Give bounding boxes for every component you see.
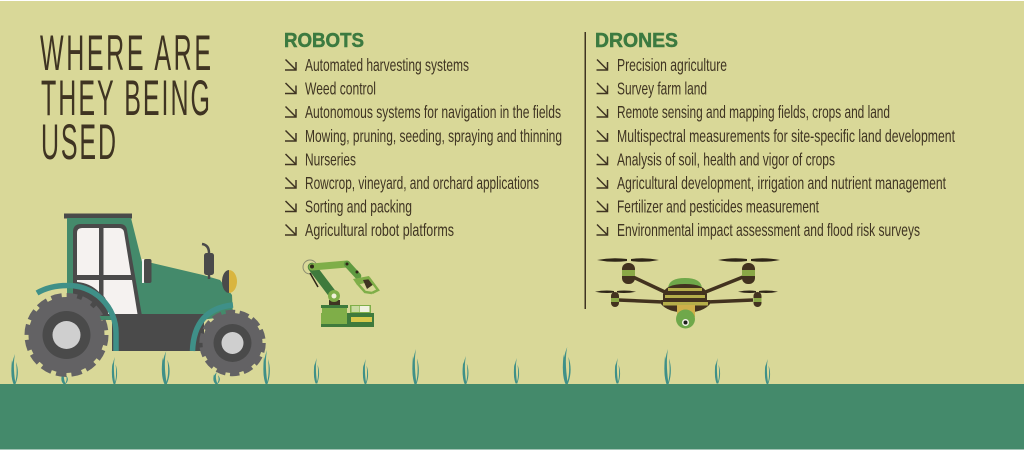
cab window <box>73 224 142 316</box>
robots list items: Rowcrop, vineyard, and orchard applications <box>305 173 539 193</box>
drones list items: Fertilizer and pesticides measurement <box>617 196 819 216</box>
drones list items: Precision agriculture <box>617 55 727 75</box>
robots list items: Autonomous systems for navigation in the fields <box>305 102 561 122</box>
drone motors <box>611 263 762 307</box>
ground <box>0 384 1024 450</box>
mirror <box>142 259 144 283</box>
title: WHERE ARE <box>40 26 211 81</box>
arm joints <box>328 290 340 302</box>
icon: drone <box>595 258 780 328</box>
robots list items: Mowing, pruning, seeding, spraying and thinning <box>305 126 562 146</box>
drones list items <box>596 55 955 240</box>
headlight <box>222 270 237 293</box>
robots list items: Weed control <box>305 78 376 98</box>
rear wheel <box>27 296 106 374</box>
heading: robots: ROBOTS <box>284 30 364 52</box>
upper arm <box>312 264 347 267</box>
icon: robot arm <box>303 260 378 327</box>
exhaust pipe <box>202 244 209 279</box>
robots list items <box>285 55 562 240</box>
grass <box>11 347 770 384</box>
divider between columns <box>584 32 586 309</box>
robots list items: Nurseries <box>305 150 356 170</box>
lower arm <box>312 267 334 296</box>
drones list items: Analysis of soil, health and vigor of crops <box>617 150 835 170</box>
robot base <box>322 307 347 324</box>
drone camera <box>677 305 695 317</box>
icon: tractor <box>27 214 264 374</box>
cab and hood body <box>67 218 233 320</box>
gripper <box>353 276 372 285</box>
title: USED <box>41 115 116 170</box>
heading: drones: DRONES <box>595 30 678 52</box>
drone rotors <box>595 258 780 293</box>
drone body <box>668 278 702 288</box>
cable and pivot ring <box>303 260 317 274</box>
front fender <box>192 305 233 351</box>
title <box>40 26 211 170</box>
robot pedestal <box>329 300 340 305</box>
robots list items: Automated harvesting systems <box>305 55 469 75</box>
robots list items: Sorting and packing <box>305 196 412 216</box>
panel: drones list <box>595 30 955 240</box>
drones list items: Remote sensing and mapping fields, crops and land <box>617 102 890 122</box>
title: THEY BEING <box>41 71 210 126</box>
rear fender <box>37 285 116 351</box>
robots list items: Agricultural robot platforms <box>305 220 454 240</box>
drones list items: Survey farm land <box>617 78 707 98</box>
front wheel <box>202 312 264 374</box>
drone arms <box>618 277 753 302</box>
control panel <box>350 305 371 314</box>
panel: robots list <box>284 30 562 240</box>
cab roof <box>64 214 132 218</box>
chassis <box>112 314 204 351</box>
